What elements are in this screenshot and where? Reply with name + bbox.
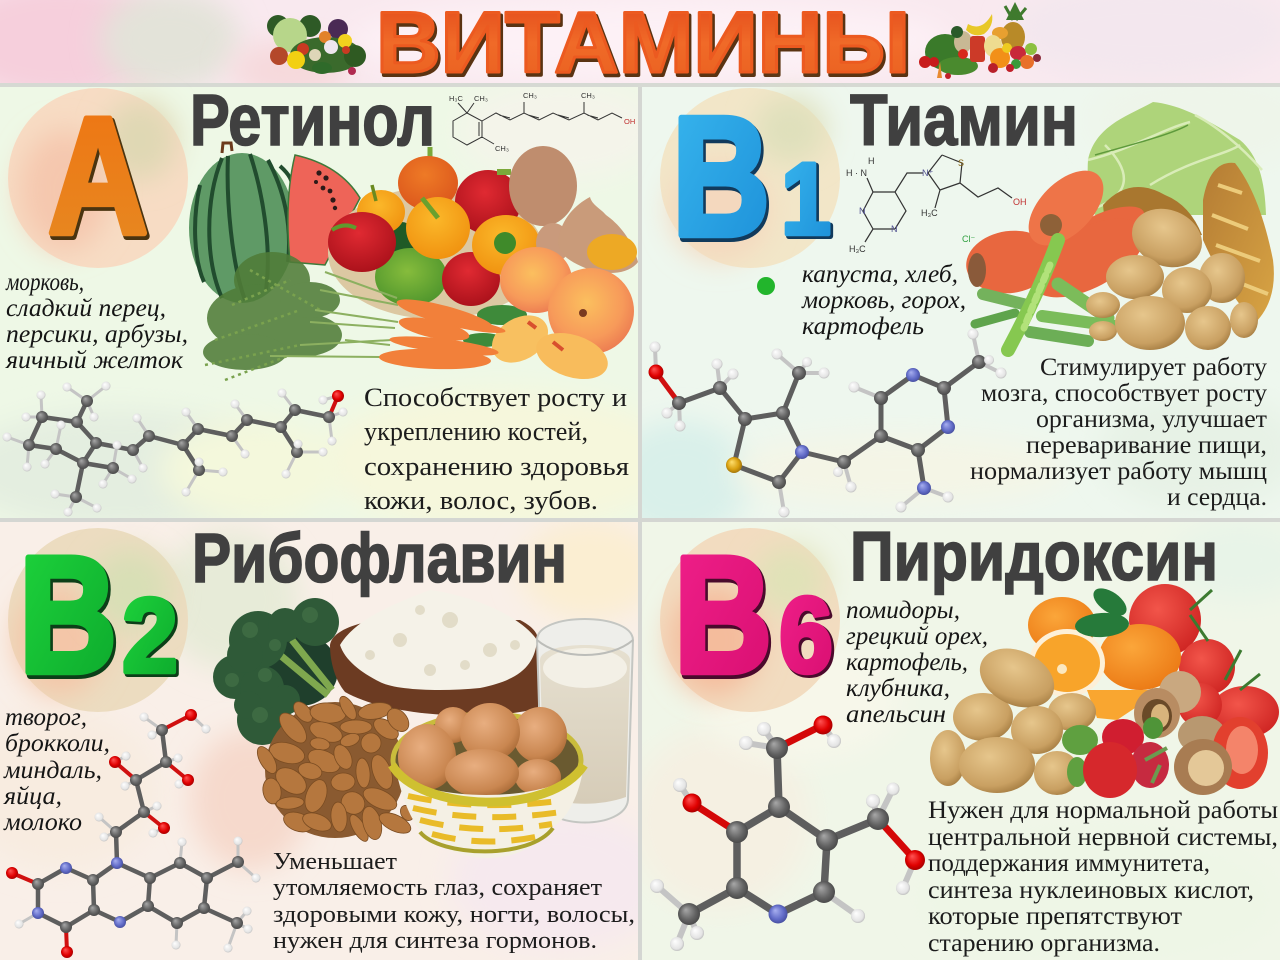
list: food sources B1: капуста, хлеб,: [802, 261, 958, 288]
food: leaves: [1074, 583, 1260, 690]
description A: укреплению костей,: [364, 417, 588, 446]
structural formula: thiamine: H₃C: [921, 208, 938, 218]
structural formula: retinol: H₃C: [449, 94, 463, 103]
list: food sources B6: [846, 597, 988, 728]
food: basket of eggs: [392, 703, 584, 858]
panel background B2: [0, 520, 670, 960]
structural formula: thiamine: N: [859, 206, 866, 216]
description B2: нужен для синтеза гормонов.: [273, 928, 597, 954]
list: food sources B2: творог,: [5, 704, 87, 731]
description B1: и сердца.: [1167, 484, 1267, 511]
list: food sources A: сладкий перец,: [6, 295, 166, 322]
header background: [0, 0, 1280, 83]
food: oranges: [1028, 597, 1181, 720]
structural formula: retinol: OH: [624, 117, 635, 126]
panel background A: [0, 87, 638, 518]
food: bread: [1103, 163, 1274, 323]
description A: Способствует росту и: [364, 383, 627, 412]
title: ВИТАМИНЫ: [378, 0, 912, 94]
description B1: мозга, способствует росту: [981, 380, 1268, 407]
list: food sources B2: брокколи,: [5, 730, 110, 757]
food: eggs and shell: [509, 146, 638, 273]
description A: [364, 383, 629, 515]
list: food sources B6: грецкий орех,: [846, 623, 988, 650]
structural formula: retinol: CH₃: [581, 91, 595, 100]
structural formula: retinol: CH₃: [523, 91, 537, 100]
list: food sources B1: морковь, горох,: [801, 287, 966, 314]
food: potatoes: [1086, 199, 1258, 350]
header band: [0, 0, 1280, 83]
food: peppers: [328, 147, 540, 306]
heading: Рибофлавин: Рибофлавин: [192, 519, 567, 597]
list: food sources B6: апельсин: [846, 701, 946, 728]
panel: vitamin A: [0, 87, 638, 518]
green atom dot: [757, 277, 775, 295]
description B6: Нужен для нормальной работы: [928, 797, 1278, 824]
list: food sources A: яичный желток: [5, 347, 183, 374]
letter B2: 2: [124, 579, 180, 697]
description B1: переваривание пищи,: [1026, 432, 1267, 459]
description B2: здоровыми кожу, ногти, волосы,: [273, 902, 635, 928]
description B2: Уменьшает: [273, 849, 398, 875]
heading: Пиридоксин: Пиридоксин: [850, 517, 1218, 595]
description B6: поддержания иммунитета,: [928, 850, 1210, 877]
icon: vegetables left: [267, 15, 366, 75]
letter B6: 6: [779, 574, 833, 695]
food: potatoes: [930, 637, 1096, 795]
structural formula: thiamine: [846, 155, 1026, 254]
description B6: синтеза нуклеиновых кислот,: [928, 877, 1254, 904]
list: food sources B2: молоко: [3, 809, 82, 836]
letter circle B2: [8, 528, 188, 712]
structural formula: retinol: [449, 91, 635, 153]
list: food sources B2: [3, 704, 110, 836]
food: almonds: [253, 694, 416, 844]
structural formula: thiamine: OH: [1013, 197, 1026, 207]
food: walnuts: [1134, 671, 1268, 795]
food: watermelon slice: [288, 155, 360, 265]
list: food sources B1: [801, 261, 966, 340]
food: peaches: [484, 247, 634, 387]
description A: сохранению здоровья: [364, 452, 629, 481]
food: leaves under peaches: [463, 305, 527, 347]
structural formula: thiamine: Cl⁻: [962, 234, 975, 244]
description B1: организма, улучшает: [1036, 406, 1267, 433]
food: carrots: [379, 293, 506, 371]
letter B2: 2: [122, 577, 178, 695]
list: food sources A: [5, 269, 188, 374]
molecule: thiamine: [648, 328, 1006, 518]
letter B1: 1: [783, 144, 833, 258]
letter circle B6: [660, 528, 840, 712]
panel: vitamin B2: [0, 519, 670, 960]
food: watermelon: [189, 143, 295, 303]
description B6: старению организма.: [928, 930, 1160, 957]
food: strawberries: [1062, 717, 1169, 798]
list: food sources B6: клубника,: [846, 675, 950, 702]
molecule: pyridoxine: [650, 716, 925, 951]
structural formula: thiamine: S: [958, 158, 964, 168]
structural formula: thiamine: H: [868, 156, 874, 166]
structural formula: thiamine: H₃C: [849, 244, 866, 254]
food: broccoli: [213, 598, 339, 745]
food: curd bowl: [330, 590, 538, 716]
food: peas: [975, 240, 1114, 350]
panel: vitamin B1: [642, 87, 1280, 518]
letter B6: B: [674, 523, 772, 708]
icon: fruits right: [919, 2, 1041, 79]
structural formula: thiamine: H · N: [846, 168, 867, 178]
list: food sources B1: картофель: [802, 313, 924, 340]
food: carrots: [962, 157, 1157, 314]
heading: Ретинол: Ретинол: [190, 81, 435, 161]
letter B6: 6: [781, 576, 835, 697]
structural formula: thiamine: N⁺: [922, 168, 933, 178]
description B6: [928, 797, 1278, 957]
structural formula: retinol: CH₃: [474, 94, 488, 103]
letter B1: B: [674, 85, 772, 275]
panel: vitamin B6: [630, 517, 1280, 960]
description B2: [273, 849, 635, 954]
description A: кожи, волос, зубов.: [364, 486, 598, 515]
food: cabbage: [1088, 102, 1266, 215]
letter B1: 1: [781, 142, 831, 256]
food: tomatoes: [1129, 584, 1279, 738]
letter B2: B: [19, 523, 117, 708]
panel background B1: [642, 87, 1280, 518]
heading: Тиамин: Тиамин: [850, 81, 1078, 161]
description B1: Стимулирует работу: [1040, 354, 1268, 381]
letter A: A: [50, 87, 150, 272]
description B2: утомляемость глаз, сохраняет: [273, 875, 603, 901]
list: food sources B6: помидоры,: [846, 597, 960, 624]
panel background B6: [630, 520, 1280, 960]
letter B2: B: [21, 526, 119, 711]
food: bowl: [328, 187, 544, 319]
description B1: [970, 354, 1268, 511]
molecule: retinol: [2, 382, 348, 516]
letter circle B1: [660, 88, 840, 268]
list: food sources B6: картофель,: [846, 649, 968, 676]
letter B1: B: [672, 82, 770, 272]
description B6: центральной нервной системы,: [928, 824, 1278, 851]
description B1: нормализует работу мышц: [970, 458, 1267, 485]
food: glass of milk: [537, 619, 633, 822]
description B6: которые препятствуют: [928, 903, 1182, 930]
letter B6: B: [676, 526, 774, 711]
structural formula: retinol: CH₃: [495, 144, 509, 153]
list: food sources B2: яйца,: [3, 783, 62, 810]
structural formula: thiamine: N: [891, 224, 898, 234]
molecule: riboflavin: [6, 709, 260, 958]
list: food sources A: персики, арбузы,: [6, 321, 188, 348]
food: carrot greens: [203, 252, 398, 380]
letter circle A: [8, 88, 188, 268]
letter A: A: [48, 84, 148, 269]
list: food sources A: морковь,: [5, 269, 84, 296]
list: food sources B2: миндаль,: [3, 757, 102, 784]
